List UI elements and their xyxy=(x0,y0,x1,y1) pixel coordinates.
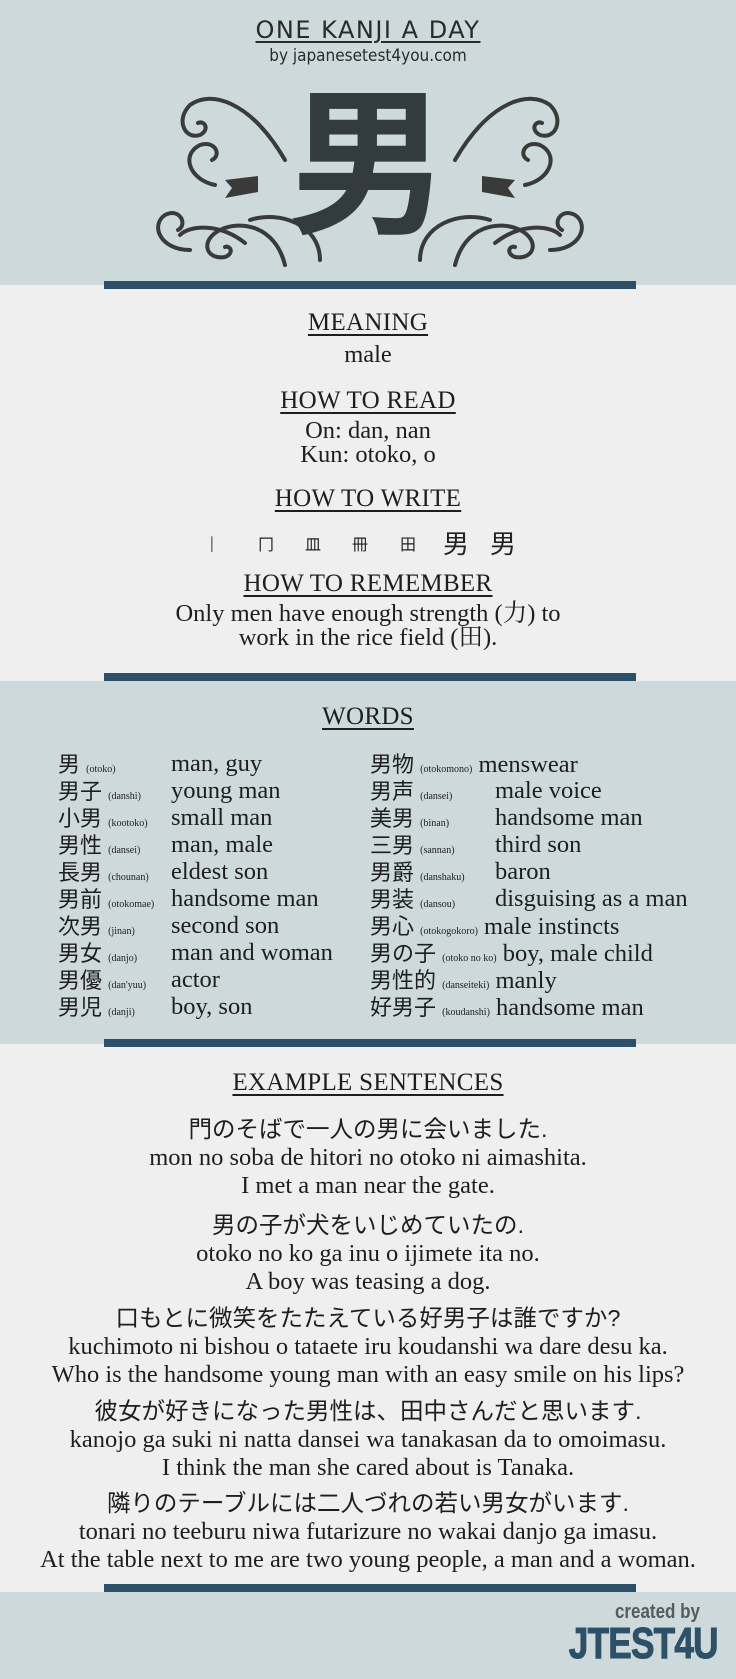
ornament swirls xyxy=(156,96,584,267)
word list right: 男装 (dansou) xyxy=(370,882,455,914)
word list right: handsome man xyxy=(495,804,643,831)
word list left: man, male xyxy=(171,831,273,858)
word list right: baron xyxy=(495,858,551,885)
panel: words xyxy=(0,681,736,1044)
heading: example sentences: EXAMPLE SENTENCES xyxy=(232,1069,504,1096)
subtitle: by japanesetest4you.com xyxy=(269,46,467,66)
word list left: second son xyxy=(171,912,279,939)
sentence 3 xyxy=(52,1305,684,1388)
word list left: handsome man xyxy=(171,885,319,912)
word list right: third son xyxy=(495,831,581,858)
word list right: male voice xyxy=(495,777,602,804)
sentence 5 xyxy=(40,1490,696,1573)
word list right xyxy=(370,747,688,1022)
word list right: 男性的 (danseiteki) manly xyxy=(370,963,557,995)
title: ONE KANJI A DAY xyxy=(256,16,480,44)
word list left: young man xyxy=(171,777,281,804)
word list right: 三男 (sannan) xyxy=(370,828,455,860)
word list right: 男の子 (otoko no ko) boy, male child xyxy=(370,936,653,968)
sentence 5: tonari no teeburu niwa futarizure no wakai danjo ga imasu. xyxy=(79,1518,657,1545)
logo: created by JTEST4U: JTEST4U xyxy=(569,1619,718,1668)
sentence 1 xyxy=(149,1116,587,1199)
word list left: 長男 (chounan) xyxy=(58,855,149,887)
word list left: 男女 (danjo) xyxy=(58,936,137,968)
heading: how to remember: HOW TO REMEMBER xyxy=(244,570,492,597)
word list left: 男優 (dan'yuu) xyxy=(58,963,146,995)
word list left: 男子 (danshi) xyxy=(58,774,141,806)
stroke order: 男 xyxy=(490,524,516,561)
word list left: 男性 (dansei) xyxy=(58,828,140,860)
logo: created by JTEST4U: created by xyxy=(615,1601,700,1623)
sentence 2: 男の子が犬をいじめていたの. xyxy=(212,1212,524,1238)
stroke order: 冂 xyxy=(258,531,274,555)
stroke order: 皿 xyxy=(305,531,321,555)
sentence 3: kuchimoto ni bishou o tataete iru koudanshi wa dare desu ka. xyxy=(68,1333,668,1360)
sentence 4 xyxy=(70,1398,666,1481)
word list left: 男 (otoko) xyxy=(58,747,116,779)
sentence 5: At the table next to me are two young people, a man and a woman. xyxy=(40,1546,696,1573)
heading: words: WORDS xyxy=(322,703,414,730)
sentence 1: 門のそばで一人の男に会いました. xyxy=(188,1116,548,1142)
word list right: 男心 (otokogokoro) male instincts xyxy=(370,909,619,941)
panel: example sentences xyxy=(40,1069,696,1573)
word list right: 男声 (dansei) xyxy=(370,774,452,806)
word list left: 小男 (kootoko) xyxy=(58,801,148,833)
stroke order xyxy=(210,524,516,561)
word list left: actor xyxy=(171,966,220,993)
word list left: man and woman xyxy=(171,939,333,966)
sentence 2 xyxy=(196,1212,540,1295)
word list right: 男物 (otokomono) menswear xyxy=(370,747,578,779)
heading: how to write: HOW TO WRITE xyxy=(275,485,461,512)
sentence 2: otoko no ko ga inu o ijimete ita no. xyxy=(196,1240,540,1267)
word list left: eldest son xyxy=(171,858,268,885)
word list left: man, guy xyxy=(171,750,262,777)
sentence 1: mon no soba de hitori no otoko ni aimashita. xyxy=(149,1144,587,1171)
stroke order: 冊 xyxy=(352,531,368,555)
sentence 4: 彼女が好きになった男性は、田中さんだと思います. xyxy=(94,1398,642,1424)
heading: how to read: HOW TO READ xyxy=(280,387,456,414)
footer background xyxy=(0,1592,736,1679)
word list left: 男児 (danji) xyxy=(58,990,135,1022)
sentence 4: I think the man she cared about is Tanaka. xyxy=(162,1454,574,1481)
sentence 3: Who is the handsome young man with an easy smile on his lips? xyxy=(52,1361,684,1388)
word list right: 好男子 (koudanshi) handsome man xyxy=(370,990,644,1022)
sentence 4: kanojo ga suki ni natta dansei wa tanakasan da to omoimasu. xyxy=(70,1426,666,1453)
word list right: 美男 (binan) xyxy=(370,801,449,833)
text: remember: Only men have enough strength (力) to xyxy=(175,600,561,627)
sentence 3: 口もとに微笑をたたえている好男子は誰ですか? xyxy=(116,1305,620,1331)
text: readings: On: dan, nan xyxy=(305,417,431,444)
text: readings: Kun: otoko, o xyxy=(300,441,436,468)
heading: meaning: MEANING xyxy=(308,309,428,336)
word list left: 男前 (otokomae) xyxy=(58,882,154,914)
sentence 5: 隣りのテーブルには二人づれの若い男女がいます. xyxy=(107,1490,629,1516)
word list left: small man xyxy=(171,804,272,831)
stroke order: 田 xyxy=(400,531,416,555)
main kanji: 男 xyxy=(288,36,448,268)
text: remember xyxy=(175,600,561,651)
word list left: boy, son xyxy=(171,993,252,1020)
text: readings xyxy=(300,417,436,468)
text: remember: work in the rice field (田). xyxy=(239,624,497,651)
header background xyxy=(0,0,736,285)
word list left xyxy=(58,747,333,1022)
text: male: male xyxy=(344,341,392,368)
word list left: 次男 (jinan) xyxy=(58,909,135,941)
sentence 1: I met a man near the gate. xyxy=(241,1172,495,1199)
sentence 2: A boy was teasing a dog. xyxy=(246,1268,490,1295)
panel: meaning/read/write/remember xyxy=(175,309,561,651)
word list right: 男爵 (danshaku) xyxy=(370,855,465,887)
stroke order: 男 xyxy=(443,524,469,561)
stroke order: | xyxy=(210,533,214,553)
word list right: disguising as a man xyxy=(495,885,688,912)
